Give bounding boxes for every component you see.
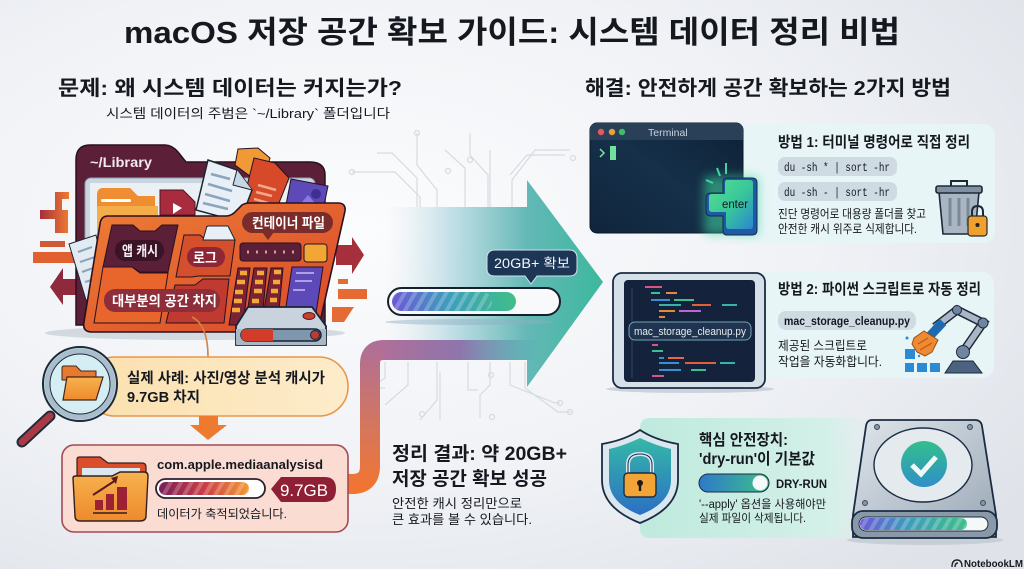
heading: solution: 해결: 안전하게 공간 확보하는 2가지 방법	[585, 77, 951, 100]
callout: real case	[86, 357, 348, 416]
toggle	[699, 474, 769, 492]
icon: hard drive with check	[847, 420, 1003, 545]
description: 진단 명령어로 대용량 폴더를 찾고	[778, 207, 926, 221]
icon: enter key: enter	[722, 199, 748, 211]
result text: 안전한 캐시 정리만으로	[392, 496, 522, 511]
file name pill	[778, 311, 916, 330]
arrow: main teal arrow to solutions	[385, 180, 603, 387]
heading: 방법 1: 터미널 명령어로 직접 정리	[778, 134, 970, 151]
file name pill: mac_storage_cleanup.py	[784, 316, 911, 328]
tag: container files: 컨테이너 파일	[252, 215, 325, 231]
compartment: logs	[176, 226, 235, 277]
compartment: large space	[104, 279, 229, 323]
icon: magnifier with folder	[22, 347, 117, 442]
panel: dry-run safety: 'dry-run'이 기본값	[699, 450, 815, 468]
icon: enter key	[704, 163, 759, 235]
compartment: large space: 대부분의 공간 차지	[112, 293, 217, 309]
result text	[392, 443, 567, 527]
callout: 20GB+ 확보: 20GB+ 확보	[494, 256, 570, 271]
side arrows right	[332, 237, 367, 322]
usage bar	[156, 479, 265, 498]
description: 제공된 스크립트로	[778, 339, 867, 353]
progress bar: 20GB+	[385, 250, 577, 325]
heading: problem: 시스템 데이터의 주범은 `~/Library` 폴더입니다	[106, 106, 390, 121]
badge: 9.7GB	[271, 477, 336, 502]
description: '--apply' 옵션을 사용해야만	[699, 498, 826, 511]
front orange folder	[84, 203, 345, 332]
command 2: du -sh - | sort -hr	[784, 186, 890, 200]
library label: ~/Library	[90, 154, 152, 170]
heading: problem: 문제: 왜 시스템 데이터는 커지는가?	[58, 77, 402, 100]
terminal window	[590, 123, 743, 233]
heading: problem	[58, 77, 402, 121]
callout: real case: 9.7GB 차지	[127, 389, 200, 406]
callout: 20GB+ 확보	[487, 250, 577, 284]
title: macOS 저장 공간 확보 가이드: 시스템 데이터 정리 비법	[124, 15, 900, 50]
arrow: orange flow from result box	[348, 350, 540, 484]
tag: container files	[242, 212, 333, 240]
tablet with script: mac_storage_cleanup.py	[634, 326, 746, 338]
command 1	[778, 157, 897, 176]
panel: method 2	[750, 272, 994, 378]
file name: com.apple.mediaanalysisd	[157, 457, 323, 472]
panel: method 1	[735, 124, 995, 243]
panel: method 2: 작업을 자동화합니다.	[778, 355, 882, 369]
tablet with script	[606, 273, 774, 393]
circuit decoration top	[350, 130, 576, 420]
inner folder and video file	[97, 188, 195, 235]
result text: 큰 효과를 볼 수 있습니다.	[392, 512, 532, 527]
compartment: app cache: 앱 캐시	[122, 243, 158, 259]
icon: trash with lock	[936, 181, 987, 236]
compartment: logs: 로그	[193, 250, 217, 266]
result text: 저장 공간 확보 성공	[392, 468, 547, 490]
small hard drive	[236, 307, 326, 345]
flying documents	[69, 148, 328, 300]
side arrows left	[33, 192, 78, 305]
icon: shield with lock	[602, 430, 678, 523]
panel: method 1: 안전한 캐시 위주로 식제합니다.	[778, 222, 917, 236]
result text: 정리 결과: 약 20GB+	[392, 443, 567, 465]
connector line folder to case	[192, 317, 208, 357]
panel: mediaanalysisd	[62, 445, 348, 532]
arrow: down	[190, 416, 227, 440]
command 2	[778, 182, 897, 201]
command 1: du -sh * | sort -hr	[784, 161, 890, 175]
icon: robot arm and broom	[905, 306, 988, 373]
toggle label: DRY-RUN	[776, 479, 827, 491]
terminal window: Terminal	[648, 127, 688, 139]
icon: overflowing Library folder	[33, 145, 367, 345]
description: 데이터가 축적되었습니다.	[157, 507, 287, 521]
badge: 9.7GB: 9.7GB	[280, 481, 328, 500]
callout: real case: 실제 사례: 사진/영상 분석 캐시가	[127, 370, 325, 387]
heading: 핵심 안전장치:	[699, 431, 788, 449]
back folder	[76, 145, 325, 325]
container grid	[229, 243, 327, 325]
heading: 방법 2: 파이썬 스크립트로 자동 정리	[778, 281, 981, 298]
icon: folder with chart	[73, 457, 148, 521]
panel: dry-run safety	[602, 418, 880, 538]
panel: dry-run safety: 실제 파일이 삭제됩니다.	[699, 511, 806, 525]
compartment: app cache	[94, 225, 178, 323]
